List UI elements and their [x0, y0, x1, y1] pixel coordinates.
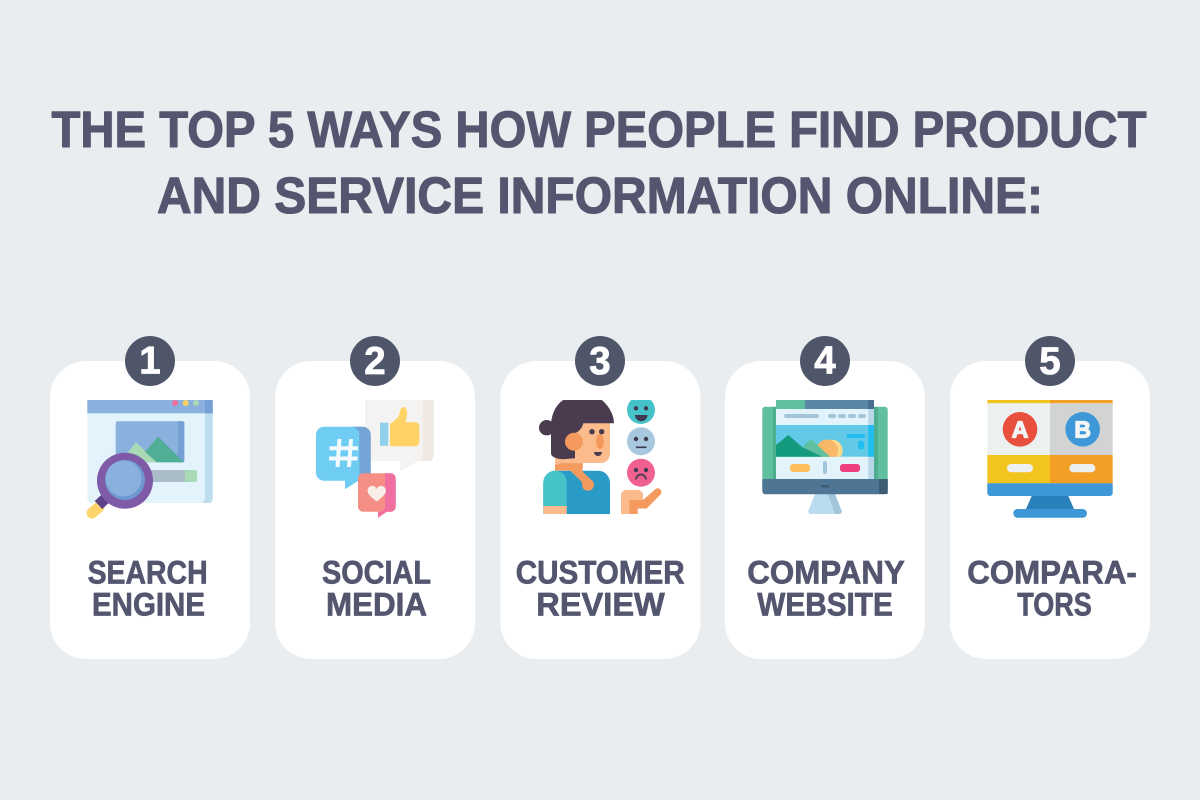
- label: WEBSITE: [757, 587, 893, 623]
- label: [747, 554, 905, 623]
- icon: A/B comparison monitor: B: [1074, 416, 1091, 442]
- label: TORS: [1017, 587, 1092, 623]
- panel: customer review: [500, 336, 700, 659]
- number badge 1: 1: [139, 340, 161, 382]
- title: [52, 101, 1146, 224]
- title: THE TOP 5 WAYS HOW PEOPLE FIND PRODUCT: [52, 101, 1146, 158]
- panel: social media: [275, 336, 475, 659]
- label: REVIEW: [536, 587, 666, 623]
- number badge 3: 3: [589, 340, 611, 383]
- icon: A/B comparison monitor: [987, 400, 1113, 518]
- number badge 1: [125, 336, 175, 386]
- number badge 5: [1025, 336, 1075, 386]
- title: AND SERVICE INFORMATION ONLINE:: [157, 167, 1043, 224]
- icon: browser window with magnifier: [87, 400, 213, 513]
- icon: website on monitor: [762, 400, 888, 514]
- number badge 2: [350, 336, 400, 386]
- label: [88, 554, 208, 623]
- panel: search engine: [50, 336, 250, 659]
- label: SOCIAL: [322, 554, 431, 590]
- panel: company website: [725, 336, 925, 659]
- label: [516, 554, 685, 623]
- number badge 3: [575, 336, 625, 386]
- icon: social speech bubbles: [316, 400, 434, 518]
- label: [322, 554, 431, 623]
- label: MEDIA: [326, 587, 427, 623]
- label: SEARCH: [88, 554, 208, 590]
- label: [967, 554, 1137, 623]
- label: CUSTOMER: [516, 554, 685, 590]
- icon: person with reaction faces: [539, 400, 661, 514]
- icon: A/B comparison monitor: A: [1012, 416, 1028, 442]
- panel: comparators: [950, 336, 1150, 659]
- number badge 4: 4: [814, 340, 836, 382]
- label: COMPARA-: [967, 554, 1137, 590]
- label: ENGINE: [92, 587, 205, 623]
- label: COMPANY: [747, 554, 905, 590]
- number badge 2: 2: [364, 340, 386, 383]
- number badge 5: 5: [1039, 340, 1061, 383]
- number badge 4: [800, 336, 850, 386]
